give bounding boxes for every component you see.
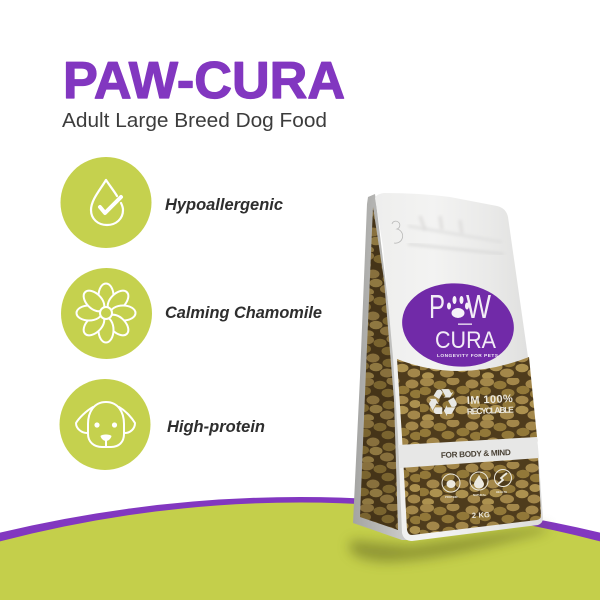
icon: water drop with check [91, 180, 123, 225]
logo: paw [447, 296, 469, 318]
logo: bar [458, 324, 472, 325]
recycle text [467, 393, 514, 416]
recycle text: RECYCLABLE [467, 404, 514, 416]
logo: tagline: LONGEVITY FOR PETS [437, 353, 499, 359]
badge captions: PROTEIN [445, 495, 457, 499]
badge icons [442, 470, 512, 492]
front kibble [397, 357, 541, 535]
label: Calming Chamomile [165, 304, 322, 322]
recycle text: IM 100% [467, 393, 513, 407]
subtitle: Adult Large Breed Dog Food [62, 109, 327, 132]
white band [398, 437, 539, 468]
logo: P W: P [429, 288, 445, 325]
badge captions: NATURAL [473, 493, 487, 497]
gusset kibble [360, 207, 398, 530]
ground: green hill [0, 502, 600, 600]
badge captions [445, 490, 507, 499]
weight: 2 KG [472, 510, 490, 520]
icon: dog face [76, 402, 135, 447]
logo oval: W [466, 288, 492, 325]
ground: purple arc [0, 497, 600, 600]
feature: hypoallergenic [60, 157, 283, 248]
top zip folds [392, 216, 504, 254]
side gusset [353, 194, 410, 540]
bag shadow [349, 526, 548, 562]
logo oval [398, 278, 518, 372]
label: High-protein [167, 418, 265, 436]
recycle icon: ♻ [426, 381, 460, 425]
product bag [349, 193, 548, 562]
feature: calming chamomile [61, 268, 322, 359]
title: PAW-CURA [63, 52, 345, 110]
front panel [375, 193, 543, 541]
band text: FOR BODY & MIND [441, 448, 511, 460]
badge captions: HEALTH [496, 490, 507, 494]
feature: high-protein [60, 379, 265, 470]
icon: flower [76, 284, 136, 342]
logo: CURA: CURA [435, 327, 496, 354]
label: Hypoallergenic [165, 196, 283, 214]
